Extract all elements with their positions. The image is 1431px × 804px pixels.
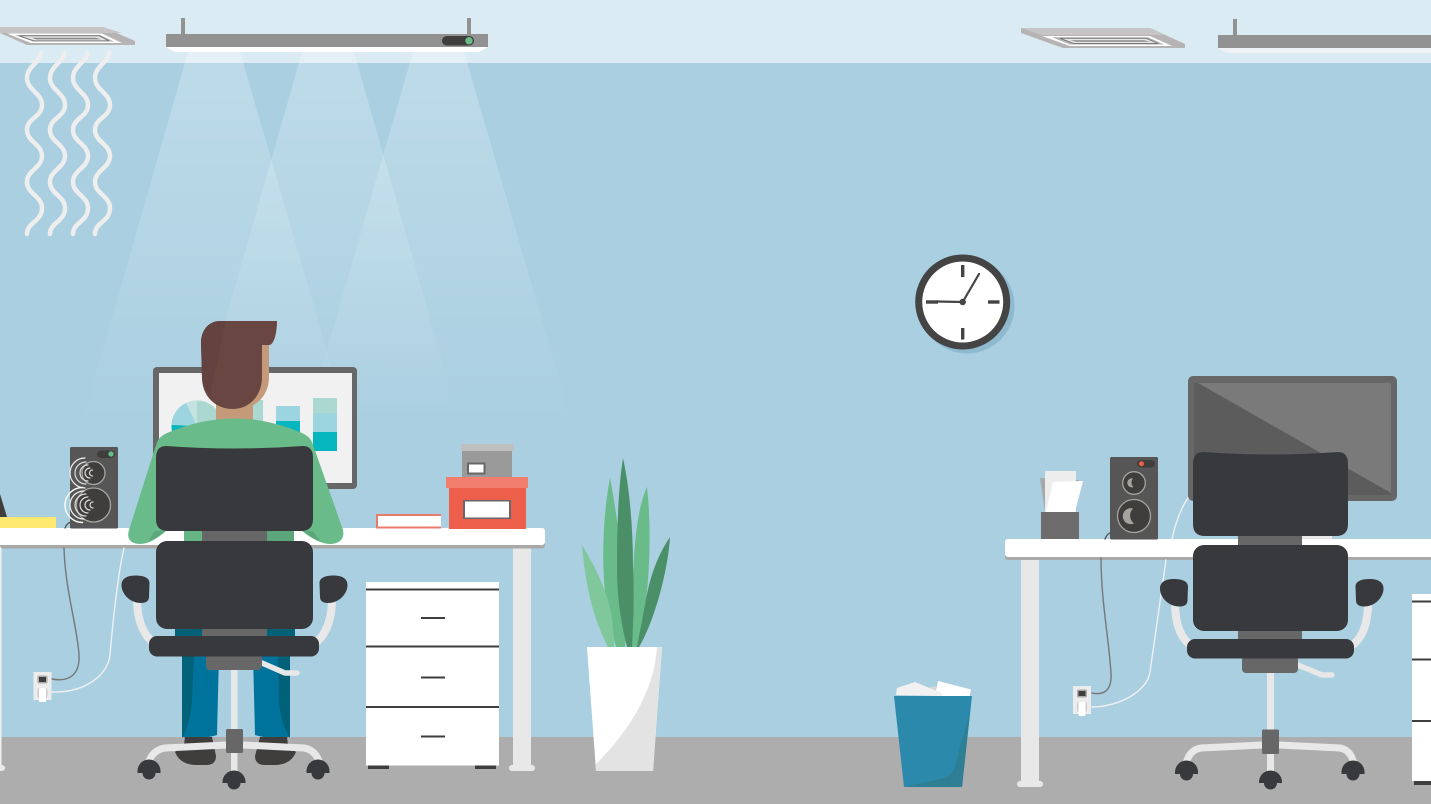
grey storage box [461,444,514,478]
cables: right [1092,498,1188,707]
casters [1175,761,1364,790]
ceiling [0,0,1431,63]
paper tray [1040,471,1083,539]
chair base [1186,656,1354,774]
book [376,514,441,528]
legs [175,629,295,738]
arm supports [1175,605,1368,646]
armrests [1160,579,1384,606]
filing cabinet: right [1412,594,1431,785]
air vent: right [1021,28,1185,48]
backrest upper [1193,452,1348,536]
speaker: right [1110,457,1158,540]
wall outlet: right [1073,686,1091,716]
left monitor [153,367,357,489]
air vent: left [0,27,135,45]
warm air waves [27,53,110,234]
chair: right [1160,452,1384,790]
right desk [1005,534,1431,787]
light beams [80,52,574,430]
person [128,321,343,765]
pot [587,647,662,771]
seat [149,636,319,656]
wall clock [915,254,1014,354]
arm supports [137,601,332,644]
backrest upper [156,446,313,531]
cables: left [52,522,124,692]
shoes [175,737,296,765]
waste bin [894,681,972,787]
right monitor [1188,376,1397,501]
chair: left [122,446,348,790]
seat [1187,639,1354,658]
armrests [122,576,348,603]
leaves [582,458,670,647]
backrest lower [156,541,313,629]
bar chart [240,398,337,451]
lamp arm [0,494,7,517]
left desk [0,528,545,771]
floor [0,737,1431,804]
sticky note pad [0,517,56,528]
wall outlet: left [34,672,52,702]
backrest lower [1193,545,1348,631]
filing cabinet: left [366,582,499,769]
ceiling light: right [1218,19,1431,53]
casters [138,760,330,790]
potted plant [582,458,670,771]
red storage box [446,477,528,529]
chair base [148,654,320,774]
pie chart [171,400,222,452]
speaker: left with sound waves [65,447,118,528]
ceiling light: left [166,18,488,52]
